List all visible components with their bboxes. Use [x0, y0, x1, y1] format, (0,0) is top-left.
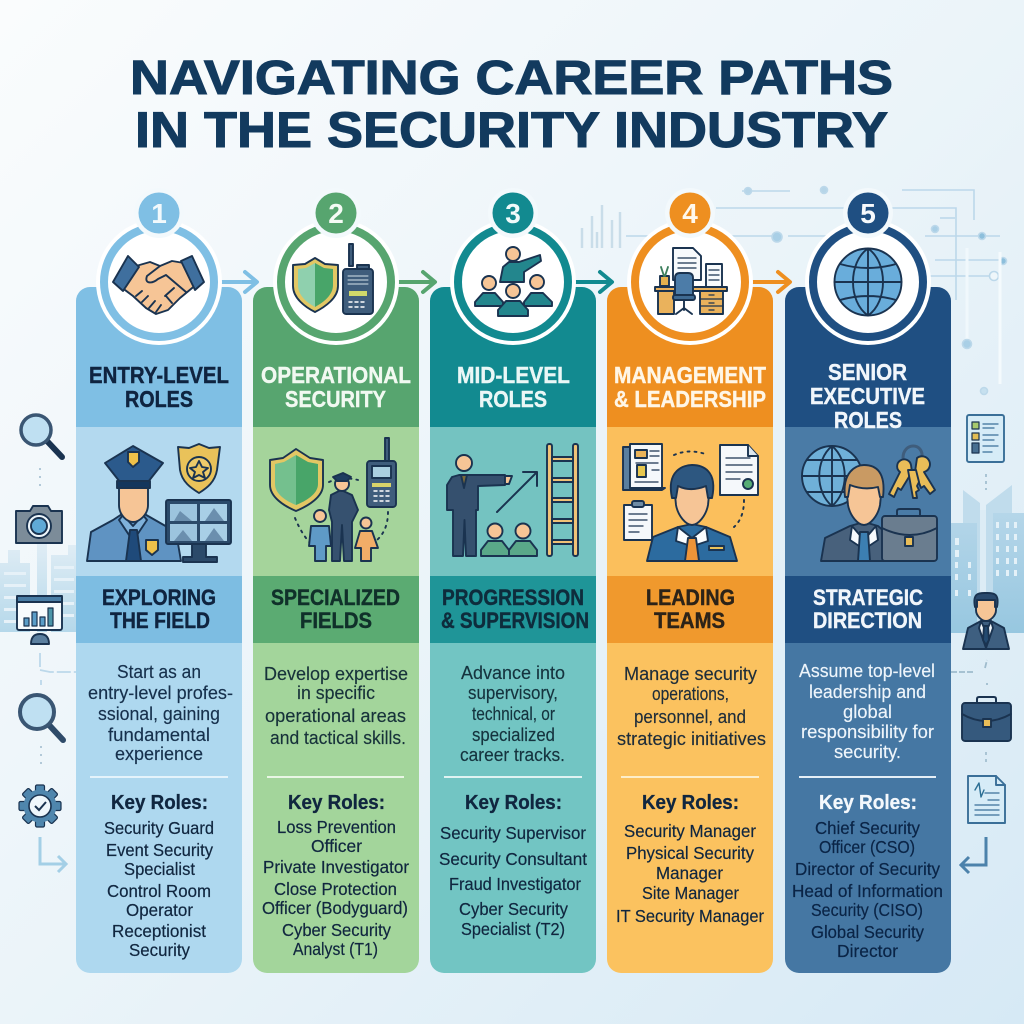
column 5 key roles: Key Roles:: [819, 792, 917, 814]
column 5 key roles: Head of Information: [792, 881, 943, 901]
icon: presenter, arrow, ladder and team: [447, 444, 578, 556]
panel: column 4 management and leadership: [607, 287, 773, 973]
column 1 subheading: [102, 585, 216, 633]
icon: person in suit: [963, 593, 1009, 649]
column 5 key roles: Global Security: [811, 922, 924, 942]
column 4 description: [617, 664, 766, 749]
icon: office desk: [655, 248, 727, 314]
column 5 description: leadership and: [809, 682, 926, 702]
step 1 badge with handshake icon: [96, 188, 222, 345]
column 1 key roles: [104, 792, 214, 960]
column 1 description: experience: [115, 744, 203, 764]
column 1 key roles: Receptionist: [112, 921, 206, 941]
column 2 key roles: Private Investigator: [263, 857, 409, 877]
column 3 header text: MID-LEVEL: [457, 362, 570, 388]
column 3 description: specialized: [472, 725, 555, 745]
icon: camera: [16, 506, 62, 543]
column 4 key roles: [616, 792, 764, 926]
icon: magnifier left lower: [20, 695, 63, 740]
column 4 header text: & LEADERSHIP: [614, 386, 766, 412]
column 2 header text: SECURITY: [285, 386, 386, 412]
column 5 description: responsibility for: [801, 722, 934, 742]
column 3 subheading: & SUPERVISION: [441, 608, 589, 633]
panel: column 2 operational security: [253, 287, 419, 973]
column 3 header text: [457, 362, 570, 412]
column 1 key roles: Security: [129, 940, 190, 960]
column 3 key roles: Key Roles:: [465, 792, 562, 814]
column 3 subheading: PROGRESSION: [442, 585, 584, 610]
connector left to panel: [40, 653, 76, 685]
icon: document: [968, 776, 1005, 823]
column 1 key roles: Control Room: [107, 881, 211, 901]
column 4 key roles: Site Manager: [642, 883, 739, 903]
column 4 key roles: Key Roles:: [642, 792, 739, 814]
column 1 subheading: EXPLORING: [102, 585, 216, 610]
column 1 description: [88, 662, 233, 764]
column 4 key roles: Security Manager: [624, 821, 756, 841]
icon: monitor with chart: [17, 596, 62, 644]
icon: shield, guard with family, and radio: [270, 438, 396, 561]
column 5 key roles: Officer (CSO): [819, 837, 915, 857]
column 4 key roles: Manager: [656, 863, 723, 883]
column 1 key roles: Key Roles:: [111, 792, 208, 814]
column 1 key roles: Operator: [126, 900, 193, 920]
column 4 description: operations,: [652, 684, 729, 704]
column 5 key roles: [792, 792, 943, 961]
column 4 subheading: TEAMS: [654, 608, 725, 633]
column 4 header text: [614, 362, 766, 412]
column 5 header text: ROLES: [834, 407, 902, 433]
column 3 description: technical, or: [472, 704, 555, 724]
column 2 description: and tactical skills.: [270, 728, 406, 748]
column 5 subheading: [813, 585, 923, 633]
icon: handshake: [113, 256, 204, 314]
arrow: step 2 to 3: [399, 272, 435, 292]
title: IN THE SECURITY INDUSTRY: [135, 102, 888, 158]
decorative dots link right: [985, 752, 987, 766]
column 3 subheading: [441, 585, 589, 633]
column 2 header text: [261, 362, 411, 412]
column 2 key roles: Loss Prevention: [277, 817, 396, 837]
column 4 description: personnel, and: [634, 707, 746, 727]
column 3 key roles: Specialist (T2): [461, 919, 565, 939]
column 1 header text: ENTRY-LEVEL: [89, 362, 229, 388]
column 3 description: career tracks.: [460, 745, 565, 765]
column 4 key roles: IT Security Manager: [616, 906, 764, 926]
connector right to panel: [951, 660, 988, 684]
column 2 description: Develop expertise: [264, 664, 408, 684]
column 2 subheading: [271, 585, 400, 633]
column 5 header text: SENIOR: [828, 359, 907, 385]
panel: column 5 senior executive roles: [785, 287, 951, 973]
step 5 badge with globe icon: [805, 188, 931, 345]
background: right city skyline: [951, 485, 1024, 633]
column 3 key roles: Cyber Security: [459, 899, 568, 919]
column 1 description: fundamental: [108, 725, 210, 745]
column 2 description: operational areas: [265, 706, 406, 726]
column 3 key roles: Security Consultant: [439, 849, 587, 869]
icon: magnifier left top: [21, 415, 62, 457]
column 2 subheading: SPECIALIZED: [271, 585, 400, 610]
background: left city skyline: [0, 543, 76, 632]
column 3 key roles: Security Supervisor: [440, 823, 586, 843]
panel: column 3 mid-level roles: [430, 287, 596, 973]
step 4 badge with desk icon: 4: [682, 198, 698, 229]
decorative dots link right: [985, 474, 987, 490]
background: circuit lines and small bar chart: [582, 186, 1006, 394]
column 4 subheading: [646, 585, 735, 633]
title: NAVIGATING CAREER PATHS: [130, 51, 893, 105]
column 3 description: supervisory,: [468, 683, 558, 703]
column 2 key roles: [262, 792, 409, 959]
arrow: right bent: [961, 837, 986, 873]
icon: checklist: [967, 415, 1004, 462]
column 1 key roles: Specialist: [124, 859, 195, 879]
column 4 header text: MANAGEMENT: [614, 362, 766, 388]
column 2 subheading: FIELDS: [300, 608, 372, 633]
column 2 key roles: Key Roles:: [288, 792, 385, 814]
column 5 key roles: Director of Security: [795, 859, 940, 879]
column 2 key roles: Officer (Bodyguard): [262, 898, 408, 918]
column 5 key roles: Director: [837, 941, 898, 961]
column 2 key roles: Close Protection: [274, 879, 397, 899]
decorative dots link: [39, 468, 41, 492]
column 3 key roles: Fraud Investigator: [449, 874, 581, 894]
column 2 header text: OPERATIONAL: [261, 362, 411, 388]
column 1 description: ssional, gaining: [98, 704, 220, 724]
column 5 description: global: [843, 702, 892, 722]
step 3 badge with team icon: [450, 188, 576, 345]
panel: column 1 entry-level roles: [76, 287, 242, 973]
column 2 description: [264, 664, 408, 748]
icon: gear with check: [19, 785, 61, 827]
icon: executive with globe, keys and briefcase: [802, 446, 937, 561]
column 5 description: Assume top-level: [799, 661, 935, 681]
column 5 description: [799, 661, 935, 762]
column 1 description: entry-level profes-: [88, 683, 233, 703]
arrow: left bent: [40, 837, 66, 872]
column 5 subheading: DIRECTION: [813, 608, 922, 633]
column 2 key roles: Analyst (T1): [293, 939, 378, 959]
column 1 description: Start as an: [117, 662, 201, 682]
icon: globe: [834, 248, 902, 316]
column 1 header text: ROLES: [125, 386, 193, 412]
step 4 badge with desk icon: [627, 188, 753, 345]
column 2 key roles: Cyber Security: [282, 920, 391, 940]
column 5 subheading: STRATEGIC: [813, 585, 923, 610]
column 4 description: strategic initiatives: [617, 729, 766, 749]
icon: police officer with badge and monitor: [87, 444, 231, 562]
arrow: step 4 to 5: [753, 272, 790, 292]
column 2 description: in specific: [297, 683, 375, 703]
column 1 key roles: Event Security: [106, 840, 213, 860]
column 5 description: security.: [834, 742, 901, 762]
title: [130, 51, 893, 158]
decorative dots link: [40, 746, 42, 768]
column 4 key roles: Physical Security: [626, 843, 754, 863]
icon: shield and radio: [293, 244, 373, 314]
step 2 badge with shield and radio icon: [273, 188, 399, 345]
column 4 description: Manage security: [624, 664, 757, 684]
column 5 header text: [810, 359, 925, 433]
column 1 key roles: Security Guard: [104, 818, 214, 838]
column 3 header text: ROLES: [479, 386, 547, 412]
step 1 badge with handshake icon: 1: [151, 198, 167, 229]
column 1 subheading: THE FIELD: [110, 608, 210, 633]
arrow: step 3 to 4: [576, 272, 612, 292]
icon: manager with documents: [623, 444, 758, 561]
step 5 badge with globe icon: 5: [860, 198, 876, 229]
arrow: step 1 to 2: [222, 272, 257, 292]
icon: briefcase: [962, 697, 1011, 741]
column 5 key roles: Security (CISO): [811, 900, 923, 920]
column 5 header text: EXECUTIVE: [810, 383, 925, 409]
step 3 badge with team icon: 3: [505, 198, 521, 229]
column 4 subheading: LEADING: [646, 585, 735, 610]
column 2 key roles: Officer: [311, 836, 362, 856]
column 3 description: Advance into: [461, 663, 565, 683]
icon: team with leader: [475, 247, 552, 316]
column 3 key roles: [439, 792, 587, 939]
column 1 header text: [89, 362, 229, 412]
step 2 badge with shield and radio icon: 2: [328, 198, 344, 229]
column 5 key roles: Chief Security: [815, 818, 920, 838]
column 3 description: [460, 663, 565, 765]
